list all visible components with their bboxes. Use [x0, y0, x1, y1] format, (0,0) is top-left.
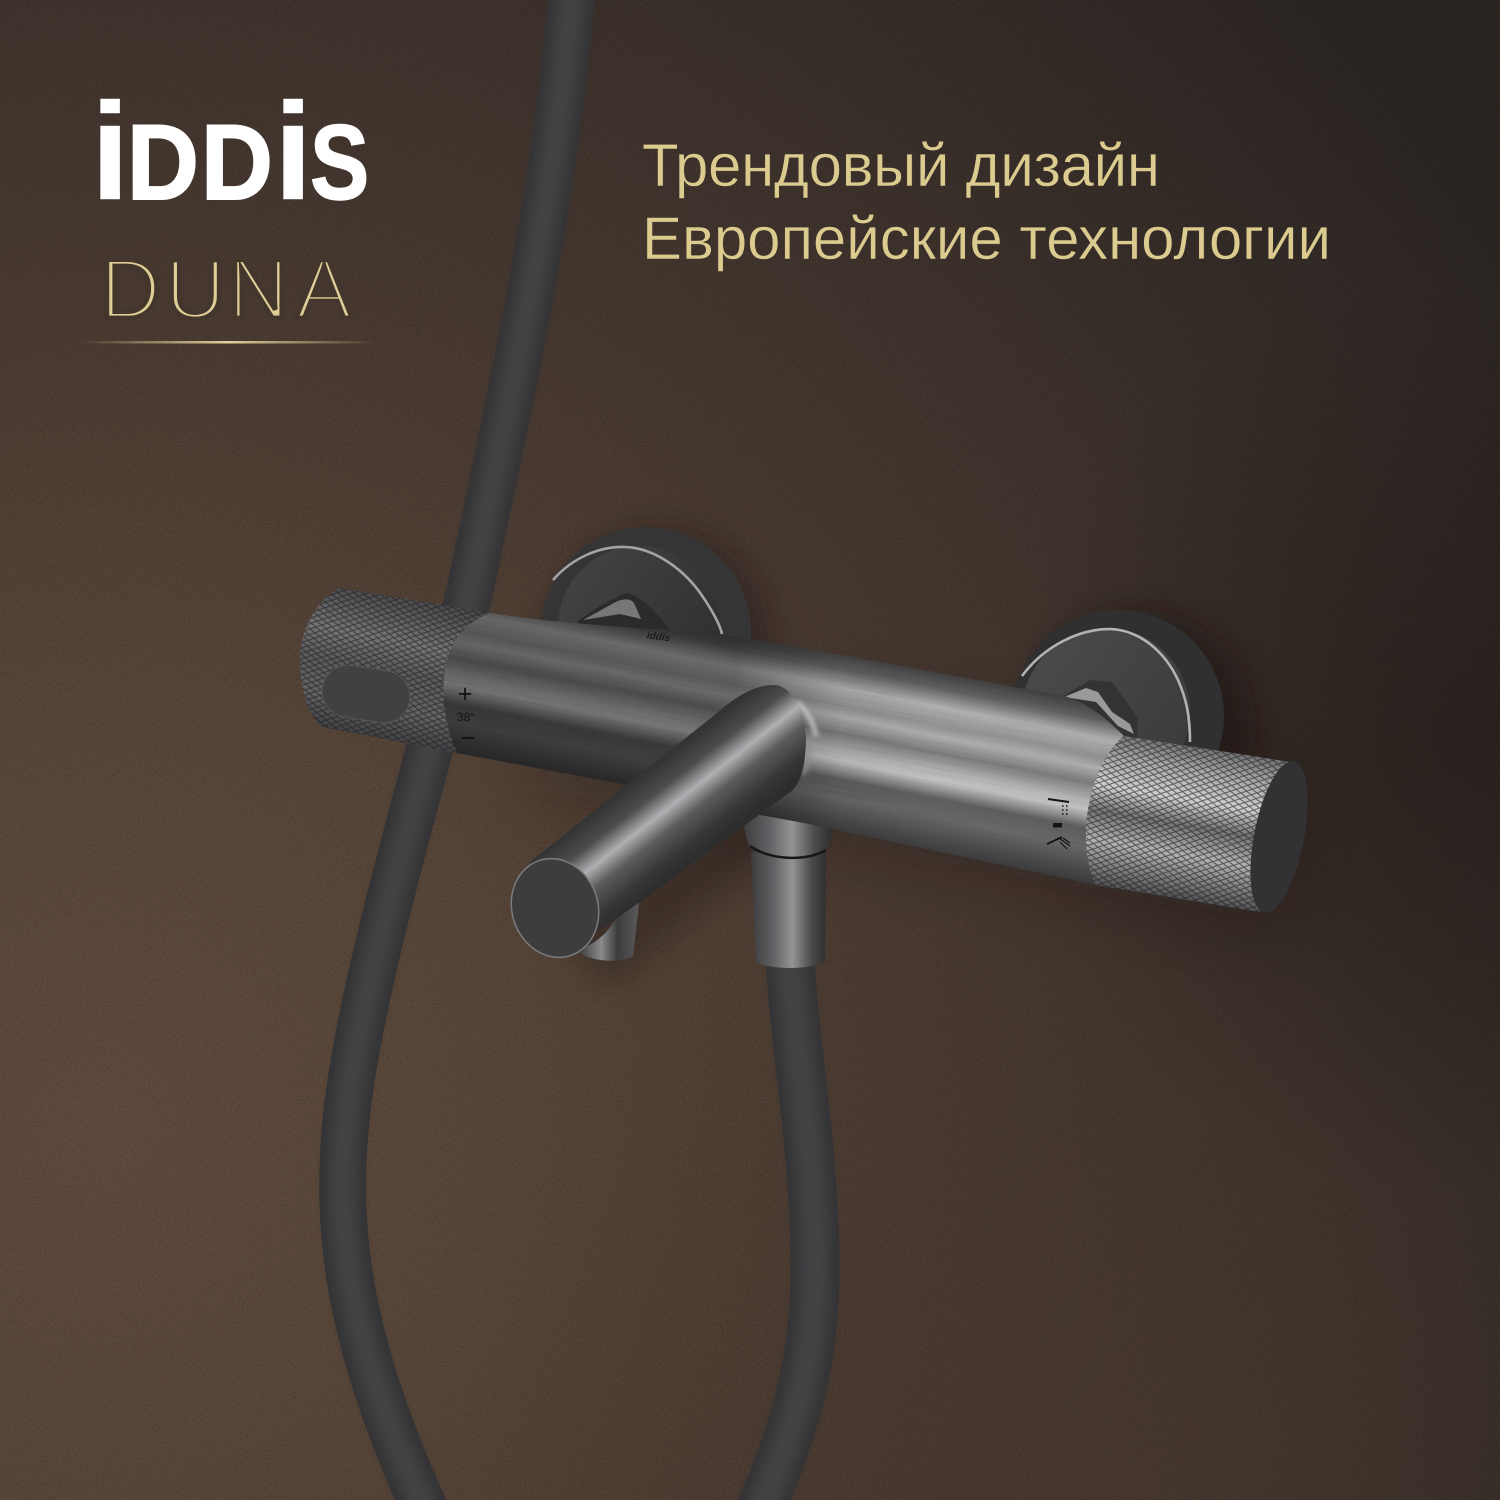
series name: DUNA: D	[100, 242, 161, 336]
shower hose, left loop	[343, 0, 572, 1500]
logo: iddis: D	[127, 102, 199, 222]
left knurled temperature knob	[300, 588, 490, 753]
shower and tub diverter icons	[1047, 799, 1070, 849]
logo: iddis: i	[91, 75, 129, 229]
headline: trendy design, European technologies: Трендовый дизайн	[642, 132, 1160, 199]
right wall mount plate	[1012, 610, 1224, 822]
headline: trendy design, European technologies: Европейские технологии	[642, 205, 1331, 272]
series name: DUNA: N	[228, 242, 289, 336]
series name: DUNA: A	[296, 242, 352, 336]
shadow cast on the wall by the faucet	[540, 528, 1300, 985]
headline: trendy design, European technologies	[642, 132, 1331, 272]
faucet body	[444, 613, 1124, 885]
thermostat marks: plus, 38 degrees, minus	[457, 680, 475, 739]
logo: iddis: S	[310, 102, 369, 222]
logo: iddis: D	[201, 102, 273, 222]
divider under the logo	[80, 341, 376, 344]
hose connector under body	[743, 812, 832, 968]
left wall mount plate	[541, 527, 751, 737]
knob end cap	[1240, 757, 1318, 917]
right knurled diverter knob	[1086, 736, 1308, 913]
knob finger grip	[318, 661, 414, 727]
thermostat marks: plus, 38 degrees, minus: 38°	[457, 710, 475, 724]
small brand mark on the body: iddis	[646, 630, 671, 644]
logo: iddis: i	[274, 75, 312, 229]
logo: iddis	[91, 75, 369, 229]
shower hose, from connector downward	[760, 960, 815, 1500]
spout end disc	[499, 847, 611, 969]
thermostat marks: plus, 38 degrees, minus: +	[458, 680, 472, 708]
bath spout	[499, 685, 806, 969]
series name: DUNA: U	[165, 242, 226, 336]
